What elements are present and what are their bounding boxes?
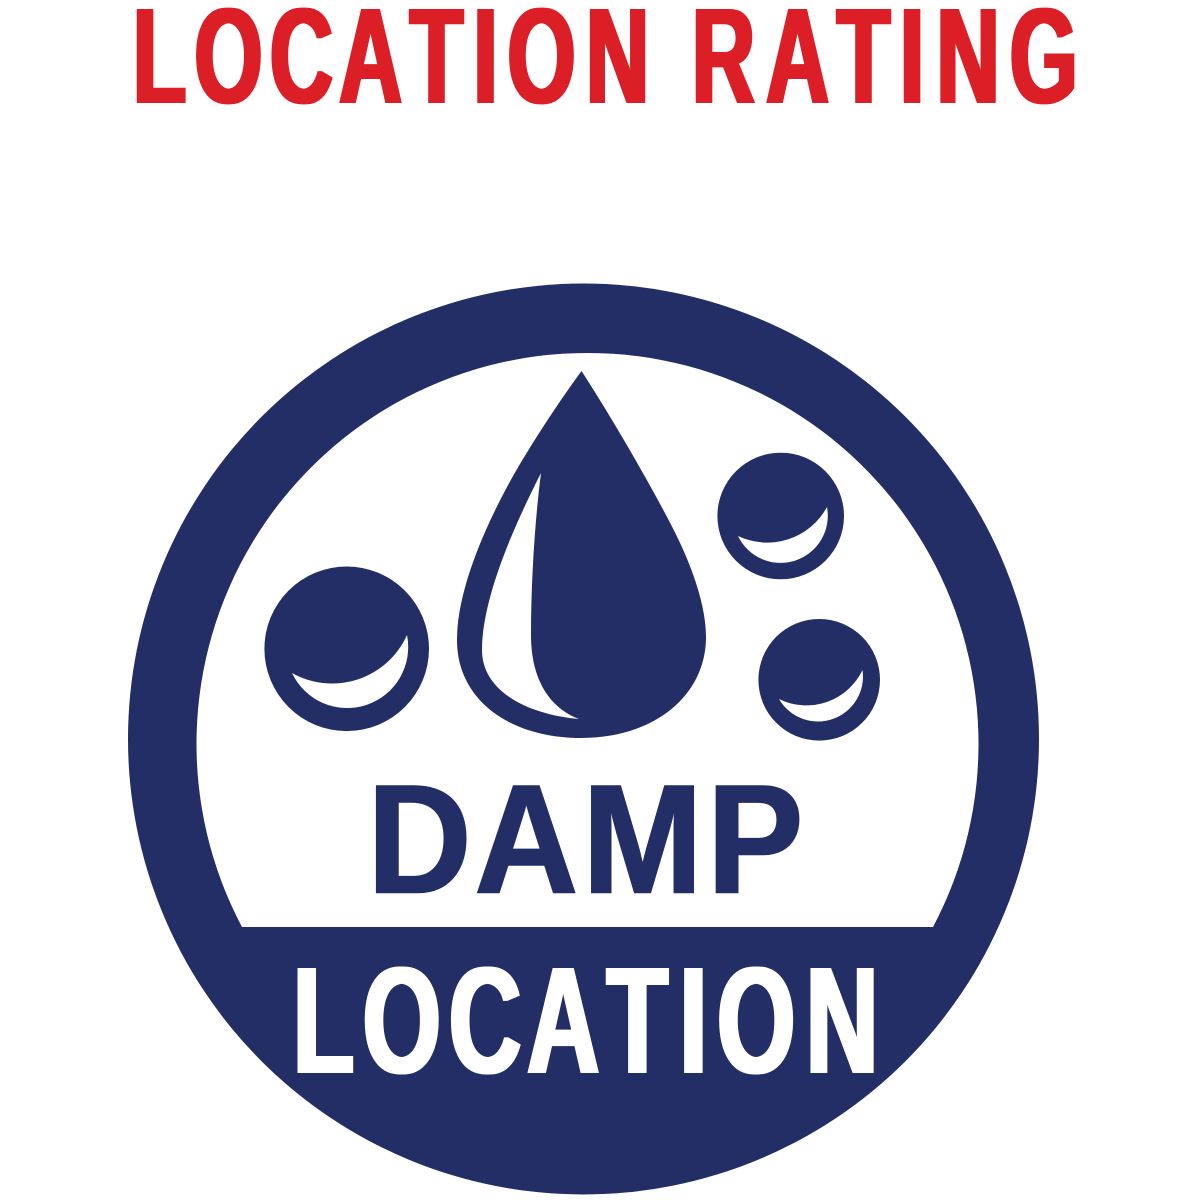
icon: left bubble <box>264 566 429 731</box>
icon: lower right bubble <box>758 619 880 741</box>
badge ring <box>128 284 1039 1194</box>
badge inner field <box>196 353 978 927</box>
label: location: LOCATION <box>293 936 878 1106</box>
icon: large water drop <box>457 371 706 738</box>
badge: damp location <box>128 284 1039 1194</box>
label: damp: DAMP <box>367 751 803 927</box>
icon: upper right bubble <box>717 453 844 579</box>
